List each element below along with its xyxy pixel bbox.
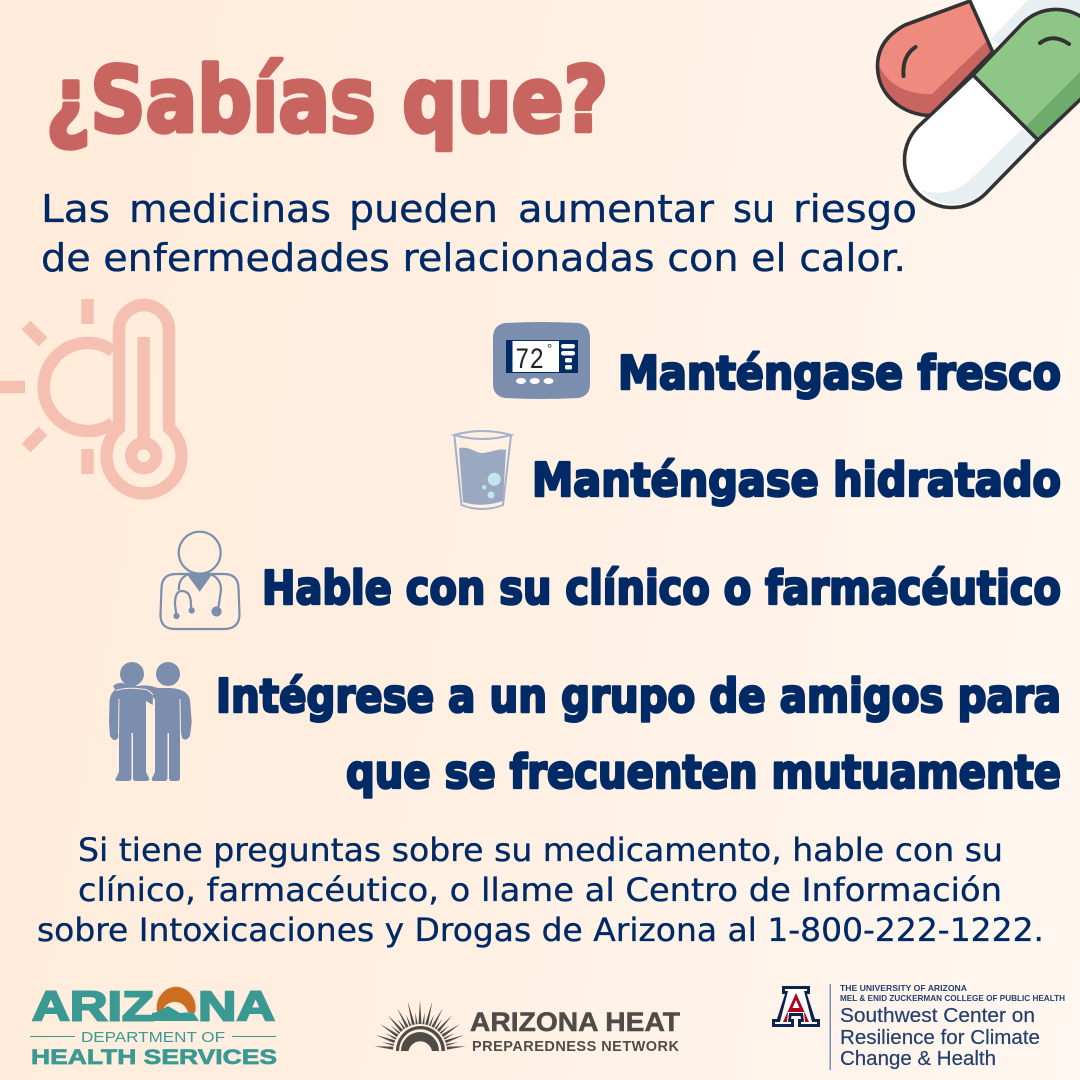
footer note: sobre Intoxicaciones y Drogas de Arizona al 1-800-222-1222. xyxy=(37,911,1044,949)
icon: thermostat: ° xyxy=(547,341,552,356)
logo divider and Southwest Center text: THE UNIVERSITY OF ARIZONA xyxy=(840,983,967,993)
green capsule half xyxy=(973,9,1080,140)
left friend xyxy=(109,688,153,781)
logo: Arizona Heat Preparedness Network: PREPAREDNESS NETWORK xyxy=(472,1039,680,1055)
footer note xyxy=(37,831,1044,949)
intro text: riesgo xyxy=(793,187,917,231)
intro text xyxy=(41,187,917,280)
intro text: medicinas xyxy=(129,187,331,231)
logo: University of Arizona block A xyxy=(772,986,820,1027)
icon: glass of water xyxy=(454,431,511,509)
intro text: de enfermedades relacionadas con el calor. xyxy=(41,236,906,280)
intro text: pueden xyxy=(349,187,498,231)
red capsule xyxy=(877,1,993,116)
white back capsule xyxy=(970,0,1080,60)
logo divider and Southwest Center text: MEL & ENID ZUCKERMAN COLLEGE OF PUBLIC HEALTH xyxy=(840,993,1065,1003)
title: ¿Sabías que? xyxy=(46,48,608,153)
icon: thermostat xyxy=(493,322,590,399)
footer note: Si tiene preguntas sobre su medicamento, hable con su xyxy=(78,831,1003,869)
icon: pills xyxy=(877,0,1080,208)
logo: Arizona Heat Preparedness Network xyxy=(374,1000,680,1055)
logo: Arizona Department of Health Services: NA xyxy=(198,982,275,1030)
icon: sun and thermometer xyxy=(0,299,182,493)
logo: Arizona Department of Health Services xyxy=(30,982,277,1069)
icon: two friends xyxy=(109,662,192,781)
logo: Arizona Department of Health Services: HEALTH SERVICES xyxy=(31,1046,277,1069)
right friend xyxy=(113,683,192,781)
sun mark xyxy=(374,1000,466,1051)
intro text: aumentar xyxy=(518,187,714,231)
icon: thermostat: 72 xyxy=(515,344,544,378)
footer note: clínico, farmacéutico, o llame al Centro de Información xyxy=(78,871,1002,909)
intro text: Las xyxy=(41,187,110,231)
logo: Arizona Department of Health Services: DEPARTMENT OF xyxy=(81,1030,225,1046)
icon: doctor xyxy=(160,532,240,629)
logo divider and Southwest Center text: Resilience for Climate xyxy=(840,1027,1040,1049)
logo divider and Southwest Center text xyxy=(830,983,1065,1070)
intro text: su xyxy=(733,187,775,231)
logo: Arizona Department of Health Services: ARIZ xyxy=(32,982,154,1030)
logo divider and Southwest Center text: Southwest Center on xyxy=(840,1005,1035,1027)
logo divider and Southwest Center text: Change & Health xyxy=(840,1048,996,1070)
white capsule half xyxy=(904,75,1038,208)
logo: Arizona Heat Preparedness Network: ARIZONA HEAT xyxy=(470,1007,680,1037)
